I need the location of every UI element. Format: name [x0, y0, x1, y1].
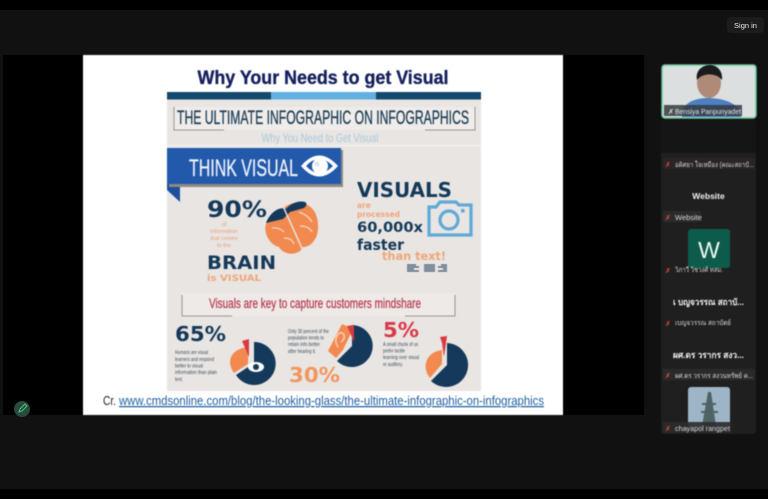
- icon: eye: [301, 156, 338, 176]
- stat: 30 percent: Only 30 percent of the: [288, 329, 329, 335]
- participant: อดิศยา: ✗: [665, 161, 671, 169]
- participant: Website: Website: [675, 213, 702, 222]
- participant: Website: ✗: [665, 214, 671, 222]
- panel: participants sidebar: [661, 65, 756, 434]
- participant: เบญจวรรณ: เ บญจวรรณ สถาบั...: [673, 297, 744, 308]
- video tile: Bensiya Panpunyadet: ✗: [668, 108, 674, 116]
- stat: 5 percent: A small chunk of us: [383, 342, 418, 348]
- stat: 65 percent: information than plain: [175, 370, 217, 376]
- header color bar: [167, 92, 481, 100]
- stat: 30 percent: retain info better: [288, 342, 320, 348]
- participant: อดิศยา: [663, 158, 755, 169]
- icon: camera: [429, 202, 471, 235]
- stat: 5 percent: or auditory.: [383, 362, 403, 368]
- stat: 90 percent brain: that comes: [210, 236, 238, 242]
- stat: 90 percent brain: BRAIN: [207, 252, 276, 274]
- mindshare banner: Visuals are key to capture customers mindshare: [209, 295, 421, 311]
- stat: 90 percent brain: of: [222, 222, 227, 228]
- participant: ผศ.ดร วรากร: [663, 350, 755, 380]
- stat: 5 percent: prefer tactile: [383, 348, 405, 354]
- stat: 90 percent brain: 90%: [207, 198, 267, 223]
- stat: 30 percent: [288, 329, 340, 387]
- stat: 5 percent: [383, 318, 419, 368]
- participant: เบญจวรรณ: ✗: [665, 320, 671, 328]
- icon: eye in pie: [248, 362, 264, 372]
- stat: 90 percent brain: to the: [217, 243, 231, 249]
- stat: 30 percent: 30%: [289, 363, 340, 387]
- panel: infographic: [167, 92, 481, 391]
- participant: วิภาวี: [665, 229, 730, 275]
- stat: 5 percent: learning over visual: [383, 355, 419, 361]
- sign in button: [727, 17, 764, 33]
- stat: 90 percent brain: is VISUAL: [207, 274, 261, 284]
- infographic subtitle: Why You Need to Get Visual: [262, 131, 378, 145]
- participant: เบญจวรรณ: เบญจวรรณ สถาบัตย์: [675, 319, 731, 327]
- mindshare banner: [182, 293, 455, 316]
- video tile: Bensiya Panpunyadet: [662, 65, 756, 118]
- stat: 65 percent: [175, 322, 226, 383]
- icon: text alignment lines: [407, 265, 447, 271]
- credit line: www.cmdsonline.com/blog/the-looking-glass/the-ultimate-infographic-on-infographics: [118, 394, 544, 408]
- stat: 5 percent: 5%: [383, 318, 419, 342]
- stat: 65 percent: text.: [175, 377, 183, 383]
- participant: อดิศยา: อดิศยา ใจเหมือง (คณะสถาบั...: [675, 160, 754, 169]
- panel: presentation slide: [83, 55, 563, 415]
- stat: 30 percent: population tends to: [288, 336, 324, 342]
- video tile: Bensiya Panpunyadet: Bensiya Panpunyadet: [675, 107, 742, 116]
- stat: 65 percent: better to visual: [175, 364, 203, 370]
- infographic heading banner: [174, 107, 475, 130]
- participant: ผศ.ดร วรากร: ✗: [665, 372, 671, 380]
- participant: เบญจวรรณ: [665, 297, 744, 328]
- stat: 30 percent: after hearing it.: [288, 349, 316, 355]
- participant: ผศ.ดร วรากร: ผศ.ดร วรากร สงวนทรัพย์ ค...: [675, 372, 753, 380]
- stat: 65 percent: learners and respond: [175, 357, 214, 363]
- participant: ผศ.ดร วรากร: ผศ.ดร วรากร สงว...: [673, 350, 744, 360]
- pie chart: 30 percent: [328, 324, 373, 367]
- credit line: Cr.: [103, 394, 116, 408]
- stat: visuals processed faster: 60,000x: [357, 220, 423, 236]
- participant: วิภาวี: W: [698, 237, 720, 263]
- participant: วิภาวี: วิภาวี วิชวงศ์ ทสม.: [675, 266, 723, 274]
- participant: วิภาวี: ✗: [665, 267, 671, 275]
- infographic heading banner: THE ULTIMATE INFOGRAPHIC ON INFOGRAPHICS: [177, 108, 469, 129]
- slide title: Why Your Needs to get Visual: [198, 67, 448, 89]
- pie chart: 5 percent: [426, 336, 468, 387]
- stat: visuals processed faster: processed: [357, 210, 400, 219]
- icon: ear: [336, 333, 344, 347]
- stat: 65 percent: 65%: [175, 322, 226, 346]
- icon: brain: [265, 202, 318, 255]
- stat: 90 percent brain: [207, 198, 276, 284]
- stat: visuals processed faster: are: [357, 201, 371, 210]
- participant: chayapol rangpet: ✗: [665, 425, 671, 433]
- participant: Website: [663, 191, 725, 222]
- sign in button: Sign in: [734, 21, 757, 30]
- icon: annotate pencil: [14, 401, 30, 417]
- participant: chayapol rangpet: chayapol rangpet: [675, 424, 731, 433]
- stat: 90 percent brain: information: [210, 229, 238, 235]
- stat: visuals processed faster: faster: [357, 236, 405, 254]
- stat: visuals processed faster: VISUALS: [357, 178, 452, 202]
- pie chart: 65 percent: [230, 339, 276, 385]
- participant: Website: Website: [692, 191, 725, 201]
- stat: 65 percent: Humans are visual: [175, 350, 208, 356]
- stat: visuals processed faster: than text!: [382, 249, 446, 263]
- think visual ribbon: [167, 148, 343, 202]
- think visual ribbon: THINK VISUAL: [189, 155, 298, 182]
- stat: visuals processed faster: [357, 178, 452, 263]
- participant: chayapol rangpet: [663, 387, 731, 433]
